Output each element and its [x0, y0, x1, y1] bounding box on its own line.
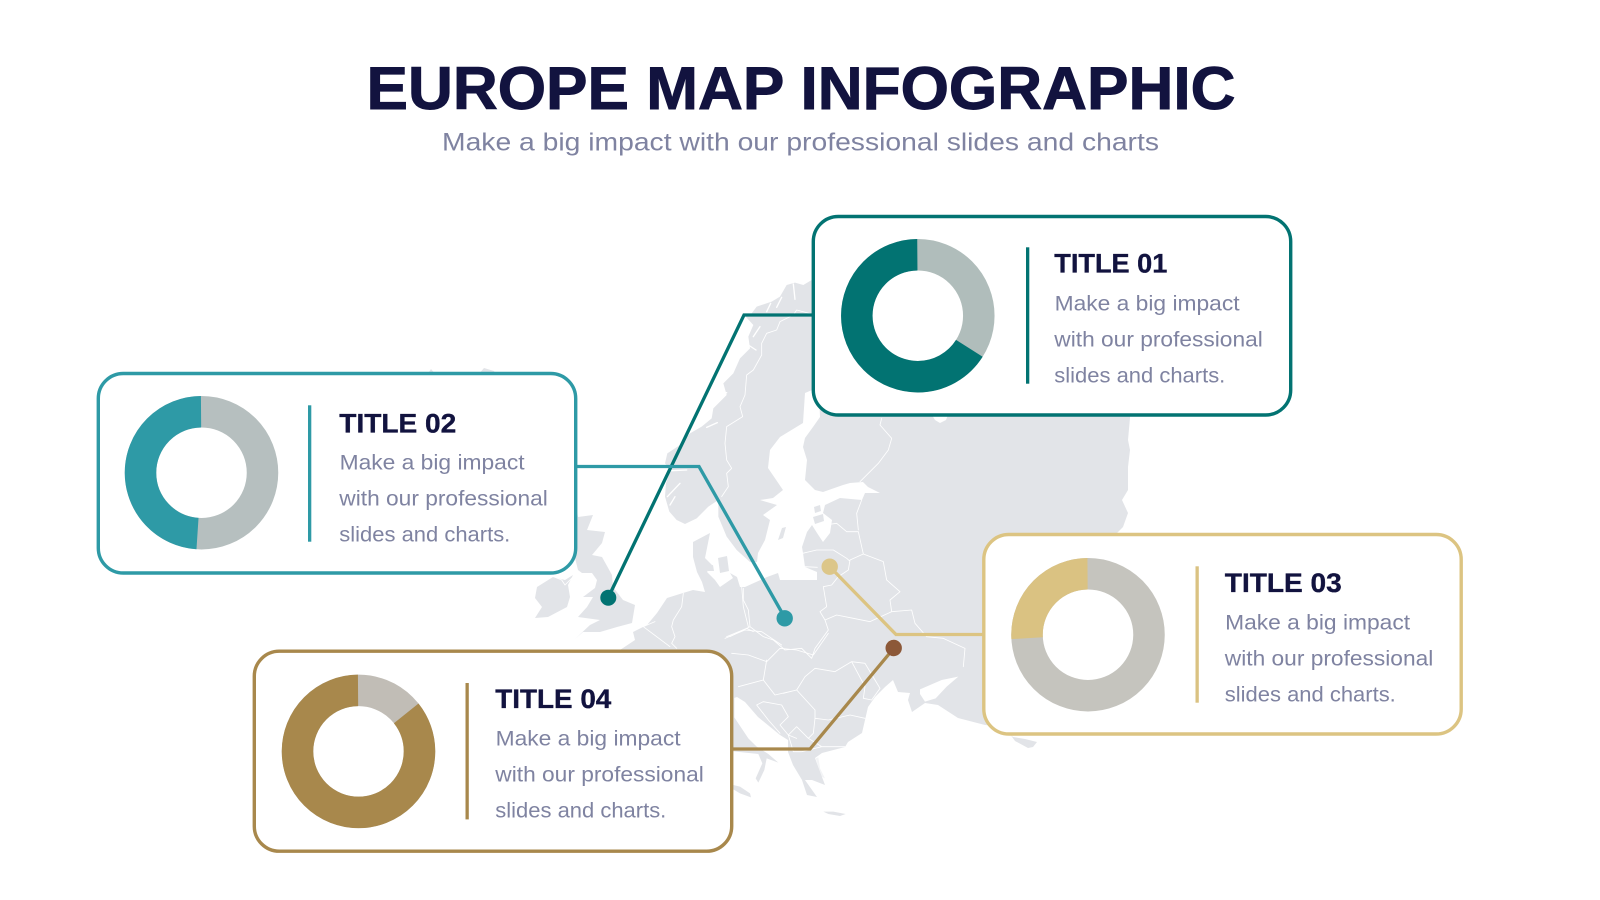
body text: Make a big impact: [1055, 292, 1240, 315]
donut chart: [140, 412, 262, 534]
divider: [1196, 566, 1199, 703]
connector: title 02 to Poland: [577, 466, 785, 618]
connector: title 03 to Lithuania: [830, 567, 985, 634]
marker: Poland: [776, 610, 793, 626]
land: continental Europe: [620, 300, 1130, 797]
donut chart: [1027, 574, 1149, 696]
land: Italy, Sicily and Crete: [728, 687, 846, 816]
Sea of Azov and lake cut-outs: [920, 415, 958, 702]
card outline: [254, 651, 732, 851]
donut chart: [298, 690, 420, 812]
country borders: [553, 418, 965, 752]
marker: UK: [600, 590, 616, 606]
connector: title 04 to Ukraine: [732, 648, 894, 749]
body text: Make a big impact: [340, 451, 525, 474]
panel: title 04: [254, 651, 732, 851]
marker: Lithuania: [822, 558, 838, 575]
panel: title 03: [984, 534, 1461, 734]
body text: slides and charts.: [495, 800, 666, 822]
divider: [308, 405, 311, 542]
card outline: [98, 374, 576, 573]
card outline: [813, 216, 1291, 415]
title: EUROPE MAP INFOGRAPHIC: [366, 55, 1236, 122]
body text: slides and charts.: [1225, 683, 1396, 706]
body text: [338, 451, 548, 546]
land: Scandinavia: [665, 277, 820, 562]
marker: Ukraine: [886, 640, 902, 656]
body text: [1053, 292, 1263, 387]
land: Ireland: [535, 575, 573, 618]
connector: title 01 to UK: [608, 315, 813, 598]
body text: [1224, 611, 1433, 706]
donut chart: [857, 255, 979, 377]
land: Great Britain: [560, 500, 635, 639]
subtitle: Make a big impact with our professional slides and charts: [442, 128, 1159, 156]
divider: [1026, 247, 1029, 384]
map of Europe: [427, 277, 1130, 816]
body text: with our professional: [1053, 328, 1263, 351]
body text: Make a big impact: [496, 728, 681, 750]
panel: title 02: [98, 374, 576, 573]
body text: with our professional: [1224, 647, 1433, 670]
body text: with our professional: [338, 487, 548, 510]
land: Baltic islands: [707, 505, 824, 573]
body text: slides and charts.: [1054, 364, 1225, 387]
heading: TITLE 03: [1225, 568, 1342, 598]
land: Caucasus coast tail: [1005, 730, 1037, 748]
body text: with our professional: [494, 764, 704, 786]
heading: TITLE 04: [495, 684, 612, 714]
body text: [494, 728, 704, 822]
card outline: [984, 534, 1461, 734]
heading: TITLE 01: [1054, 248, 1167, 278]
panel: title 01: [813, 216, 1291, 415]
body text: Make a big impact: [1225, 611, 1410, 634]
divider: [466, 683, 469, 819]
heading: TITLE 02: [339, 408, 456, 438]
body text: slides and charts.: [339, 523, 510, 546]
land: Iceland edge: [427, 368, 496, 375]
